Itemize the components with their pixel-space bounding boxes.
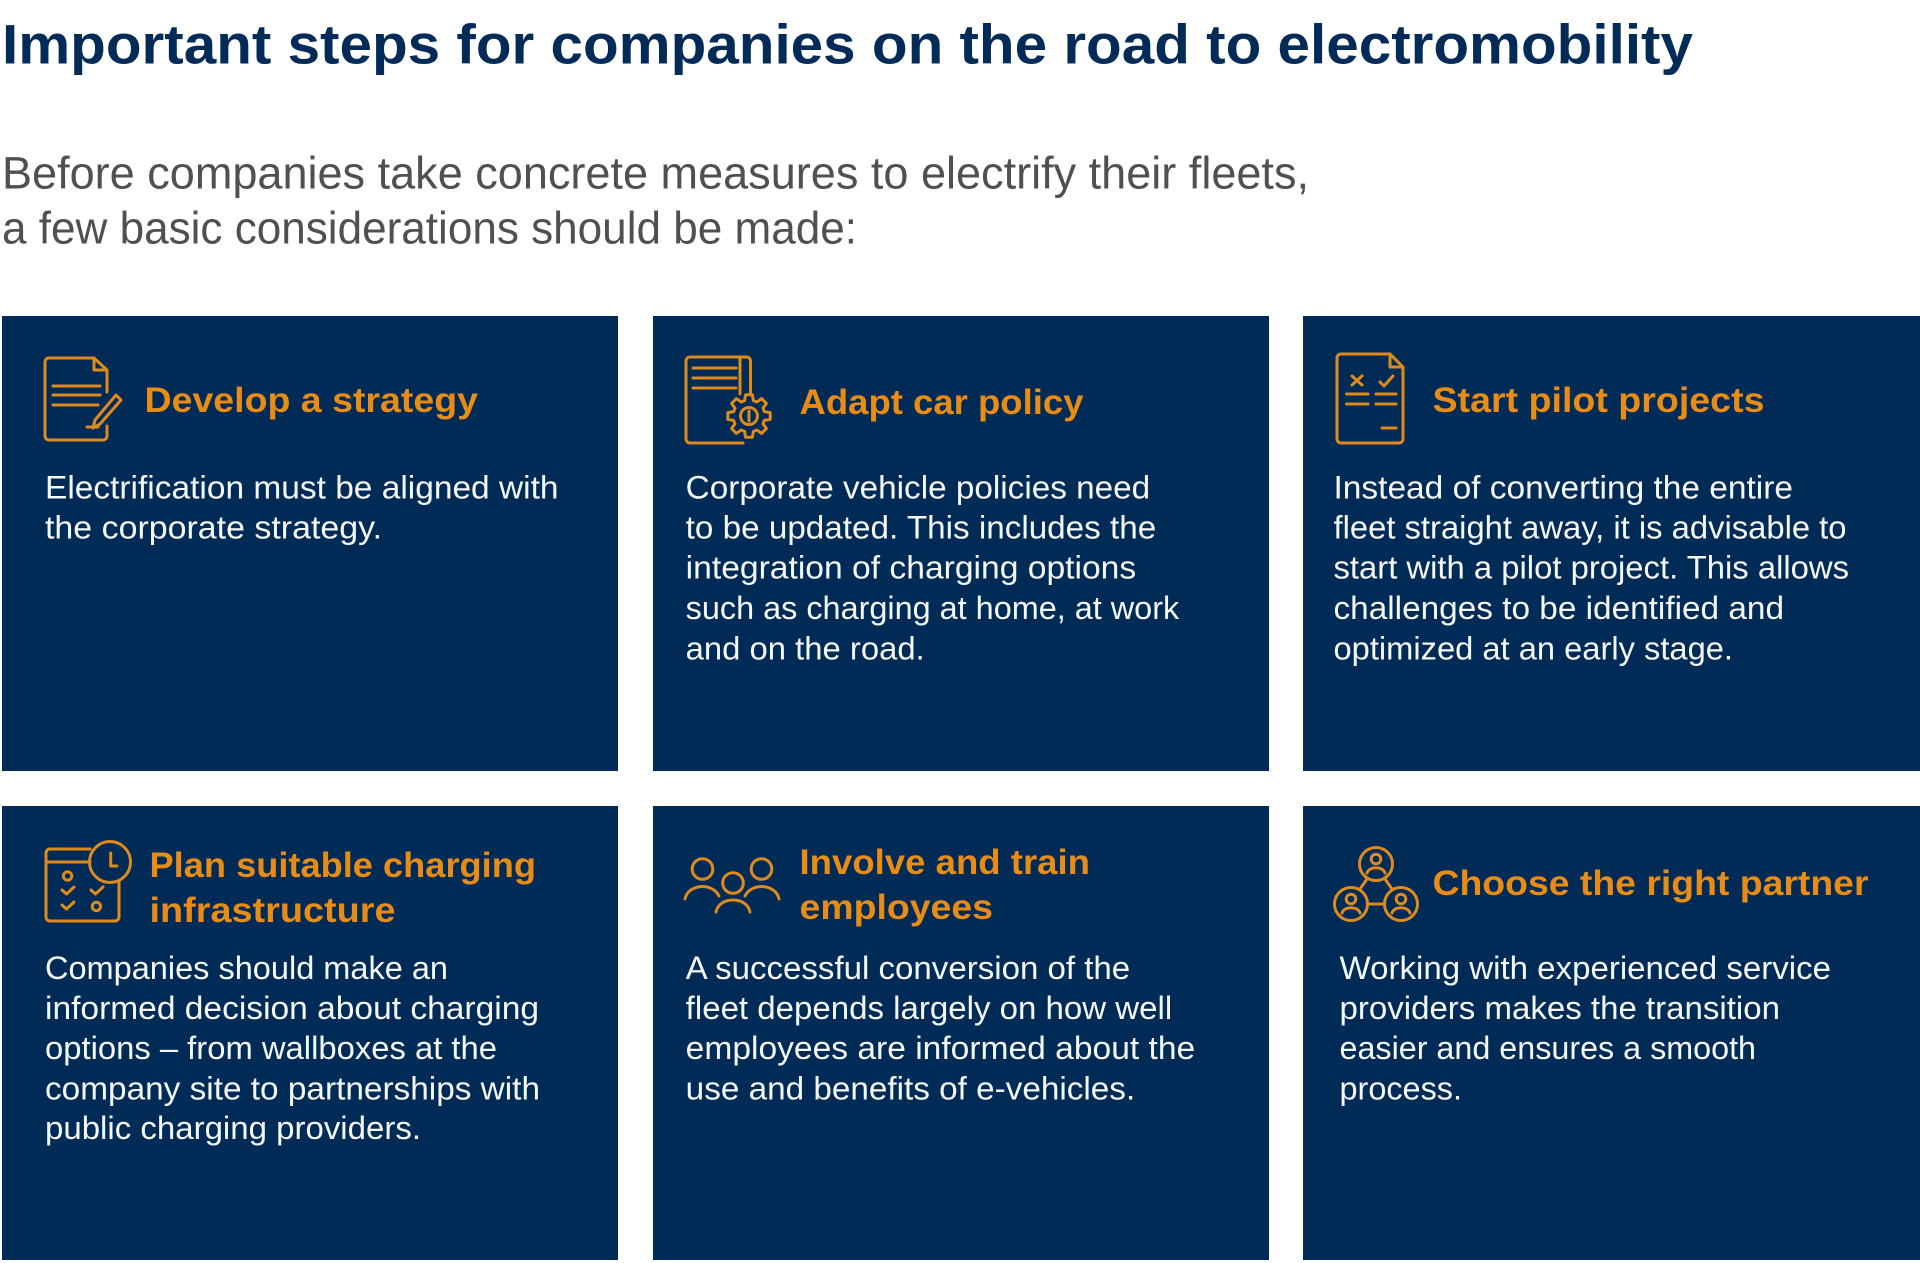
body text: optimized at an early stage. xyxy=(1334,630,1733,666)
body text: employees are informed about the xyxy=(686,1030,1195,1066)
body text: and on the road. xyxy=(686,630,925,666)
body text: easier and ensures a smooth xyxy=(1340,1030,1756,1066)
panel: plan suitable charging infrastructure xyxy=(2,806,618,1260)
heading xyxy=(150,846,536,930)
panel: develop a strategy xyxy=(2,316,618,771)
body text: providers makes the transition xyxy=(1340,990,1780,1026)
body text: Companies should make an xyxy=(45,950,448,986)
intro text: a few basic considerations should be made: xyxy=(2,202,857,254)
icon: policy book with gear xyxy=(686,357,770,443)
body text: fleet depends largely on how well xyxy=(686,990,1172,1026)
body text xyxy=(45,950,540,1146)
body text xyxy=(1334,470,1849,666)
body text: Corporate vehicle policies need xyxy=(686,470,1150,506)
body text: challenges to be identified and xyxy=(1334,590,1784,626)
heading: Choose the right partner xyxy=(1432,864,1869,903)
body text: company site to partnerships with xyxy=(45,1070,540,1106)
heading xyxy=(800,843,1090,927)
heading: Involve and train xyxy=(800,843,1090,882)
heading: Adapt car policy xyxy=(800,383,1084,422)
body text: Working with experienced service xyxy=(1340,950,1831,986)
body text: public charging providers. xyxy=(45,1110,421,1146)
body text xyxy=(686,950,1195,1106)
body text: process. xyxy=(1340,1070,1462,1106)
icon: connected partners network xyxy=(1334,848,1418,920)
heading: employees xyxy=(800,888,993,927)
body text xyxy=(1340,950,1831,1106)
body text xyxy=(45,470,558,546)
body text: integration of charging options xyxy=(686,550,1136,586)
body text: start with a pilot project. This allows xyxy=(1334,550,1849,586)
heading: Start pilot projects xyxy=(1432,381,1764,420)
heading: Develop a strategy xyxy=(144,381,479,420)
panel: adapt car policy xyxy=(653,316,1269,771)
heading: infrastructure xyxy=(150,891,396,930)
body text: A successful conversion of the xyxy=(686,950,1130,986)
panel: start pilot projects xyxy=(1303,316,1920,771)
body text: Instead of converting the entire xyxy=(1334,470,1793,506)
body text: options – from wallboxes at the xyxy=(45,1030,497,1066)
panel: involve and train employees xyxy=(653,806,1269,1260)
body text: Electrification must be aligned with xyxy=(45,470,558,506)
title: Important steps for companies on the road to electromobility xyxy=(2,12,1693,76)
intro text xyxy=(2,148,1309,254)
body text: the corporate strategy. xyxy=(45,510,382,546)
icon: calendar checklist with clock xyxy=(46,842,130,921)
icon: checklist document xyxy=(1337,354,1403,443)
body text: such as charging at home, at work xyxy=(686,590,1180,626)
panel: choose the right partner xyxy=(1303,806,1920,1260)
icon: document with pencil xyxy=(45,358,121,440)
body text: fleet straight away, it is advisable to xyxy=(1334,510,1846,546)
body text: to be updated. This includes the xyxy=(686,510,1156,546)
icon: three people xyxy=(685,859,779,912)
body text xyxy=(686,470,1180,666)
intro text: Before companies take concrete measures to electrify their fleets, xyxy=(2,148,1309,198)
heading: Plan suitable charging xyxy=(150,846,536,885)
body text: informed decision about charging xyxy=(45,990,539,1026)
body text: use and benefits of e-vehicles. xyxy=(686,1070,1135,1106)
